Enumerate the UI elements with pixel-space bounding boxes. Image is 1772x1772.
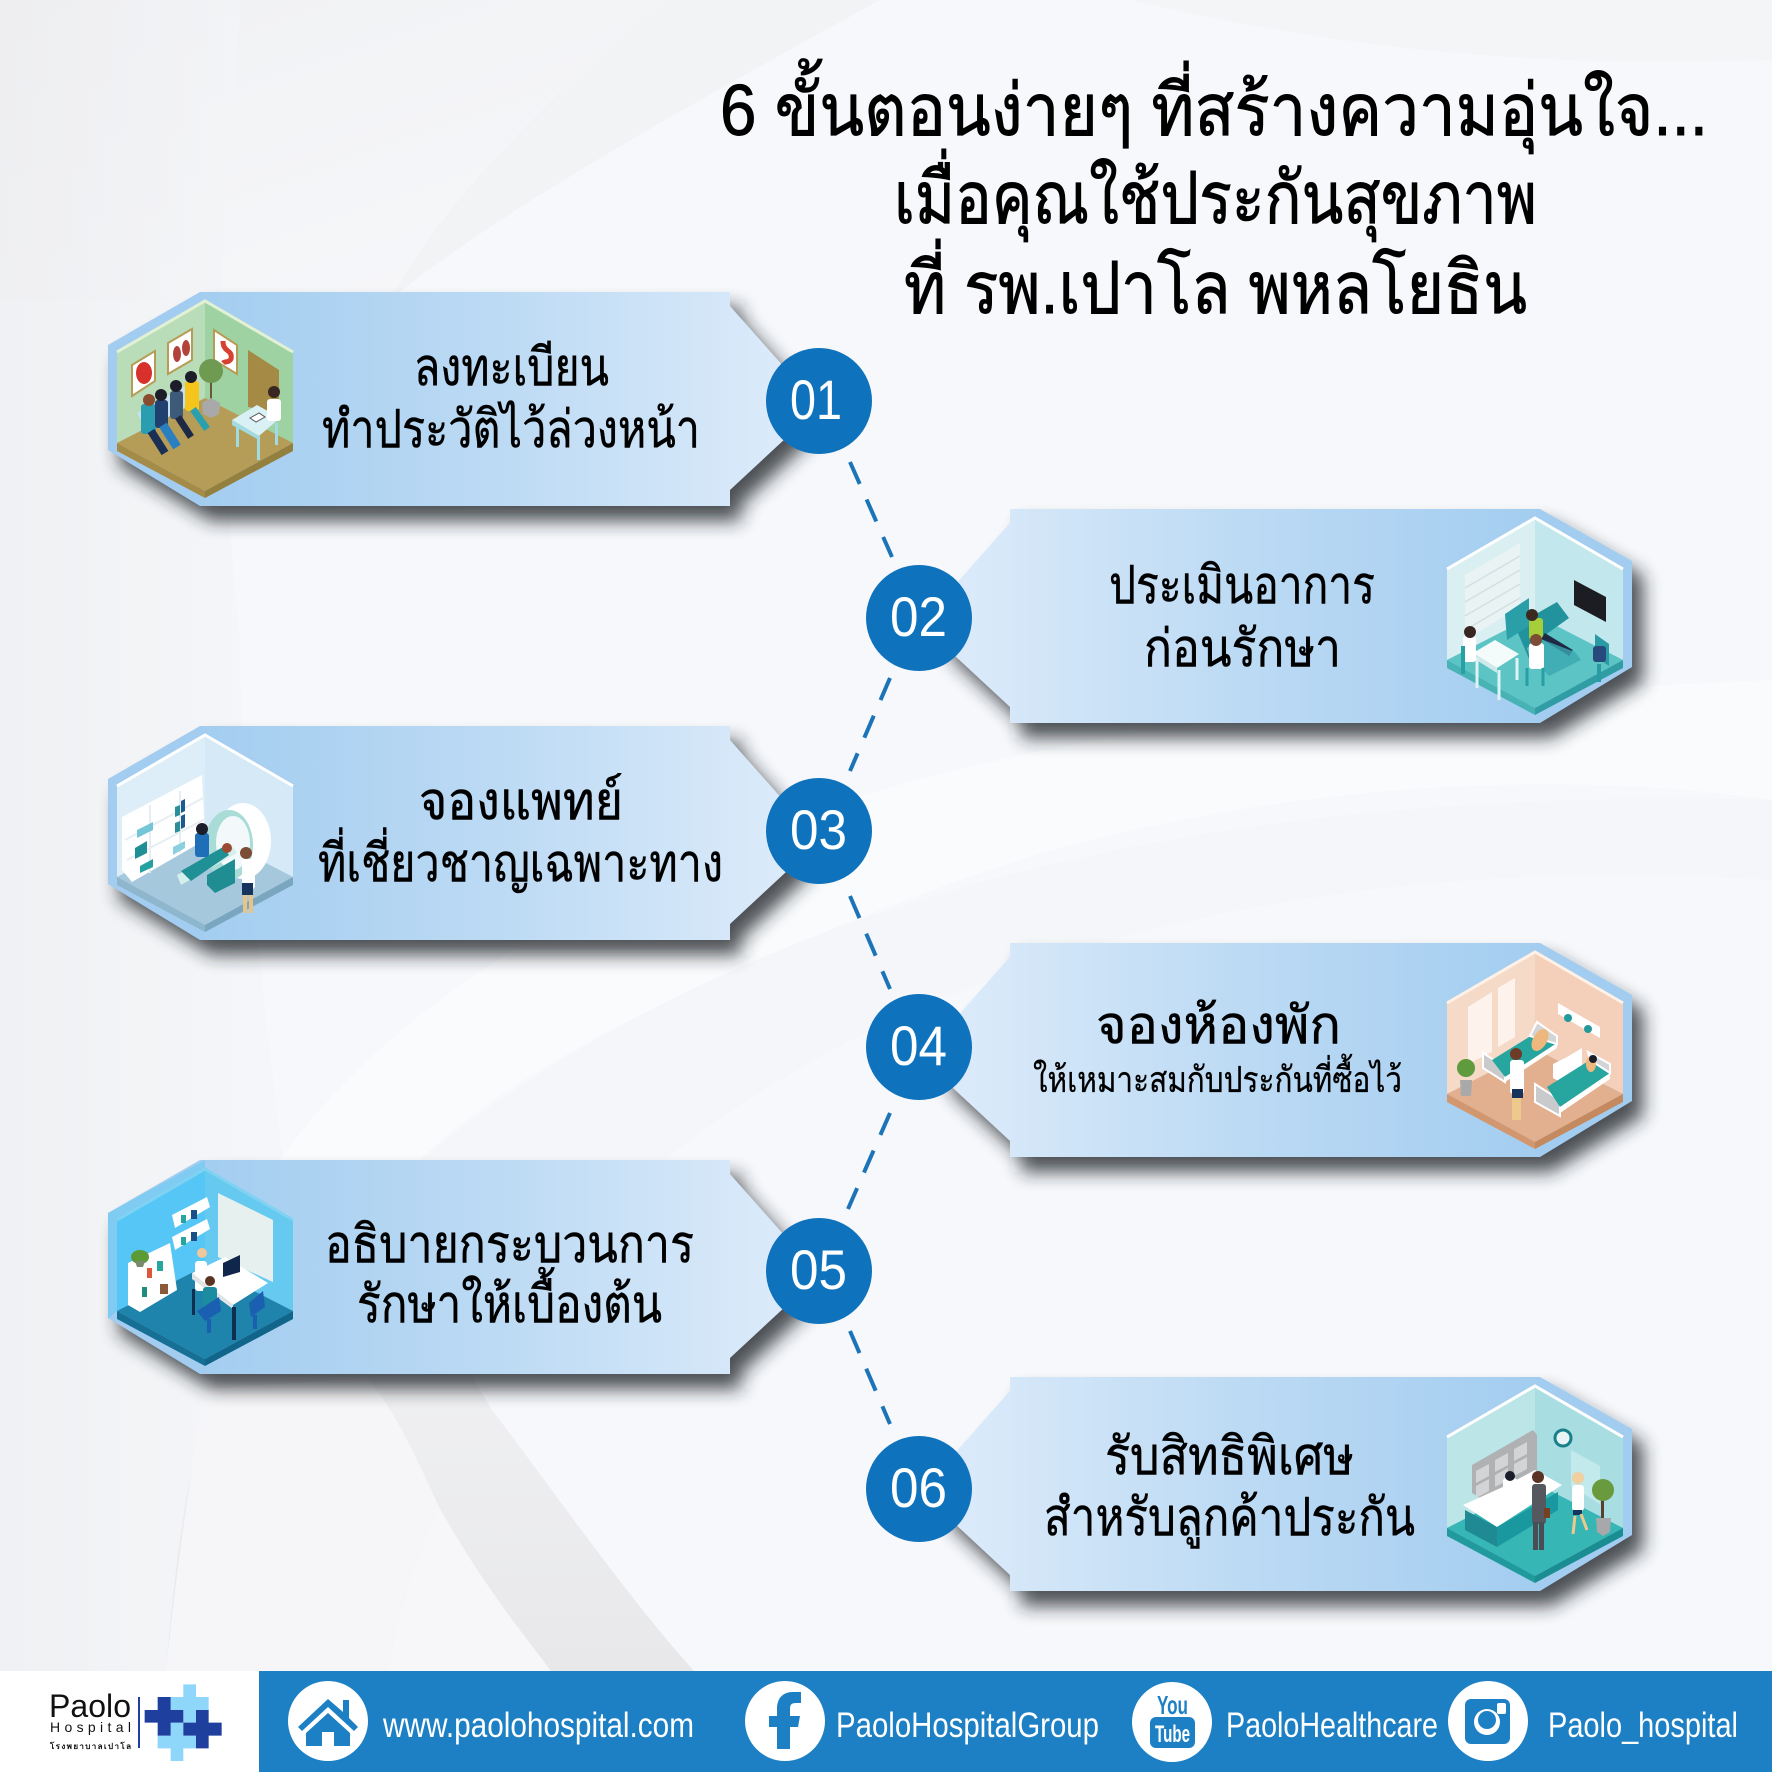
panel: step 3	[108, 726, 811, 955]
website: www.paolohospital.com	[382, 1706, 694, 1745]
logo wordmark	[49, 1688, 140, 1751]
title: เมื่อคุณใช้ประกันสุขภาพ	[894, 149, 1537, 242]
youtube name: PaoloHealthcare	[1226, 1706, 1438, 1745]
icon: home	[288, 1681, 368, 1761]
number badge 04	[866, 994, 972, 1100]
icon: youtube: Tube	[1155, 1721, 1190, 1748]
footer contact bar	[259, 1671, 1772, 1772]
logo crosses	[145, 1684, 222, 1761]
dashed connector lines	[848, 462, 892, 1424]
logo wordmark: โรงพยาบาลเปาโล	[49, 1741, 131, 1751]
step 5 label	[325, 1216, 694, 1334]
number badge 03: 03	[790, 798, 847, 861]
step 4 label: ให้เหมาะสมกับประกันที่ซื้อไว้	[1033, 1053, 1402, 1100]
step 5 label: อธิบายกระบวนการ	[325, 1216, 694, 1274]
step 2 label	[1109, 557, 1375, 678]
icon: waiting room	[117, 301, 293, 498]
step 4 label	[1033, 997, 1402, 1100]
step 4 label: จองห้องพัก	[1096, 997, 1341, 1055]
logo wordmark: Hospital	[50, 1719, 131, 1735]
step 5 label: รักษาให้เบื้องต้น	[357, 1267, 662, 1334]
icon: instagram	[1448, 1681, 1528, 1761]
footer logo panel	[0, 1671, 259, 1772]
step 1 label	[322, 339, 700, 459]
step 1 label: ลงทะเบียน	[414, 339, 609, 397]
step 3 label	[318, 773, 723, 893]
step 6 label: รับสิทธิพิเศษ	[1105, 1428, 1354, 1486]
icon: youtube	[1132, 1682, 1212, 1762]
icon: assessment room	[1447, 518, 1623, 715]
number badge 02: 02	[890, 585, 947, 648]
icon: reception room	[1447, 1386, 1623, 1583]
step 2 label: ก่อนรักษา	[1144, 620, 1341, 678]
number badge 06	[866, 1436, 972, 1542]
icon: consultation room	[108, 1160, 293, 1366]
facebook name: PaoloHospitalGroup	[836, 1706, 1099, 1745]
title	[720, 58, 1708, 329]
number badge 01	[766, 348, 872, 454]
icon: youtube: You	[1157, 1690, 1188, 1720]
number badge 06: 06	[890, 1456, 947, 1519]
number badge 02	[866, 565, 972, 671]
panel: step 5	[108, 1160, 811, 1389]
step 1 label: ทำประวัติไว้ล่วงหน้า	[322, 400, 700, 459]
number badge 05: 05	[790, 1238, 847, 1301]
instagram name: Paolo_hospital	[1548, 1706, 1738, 1745]
number badge 05	[766, 1218, 872, 1324]
number badge 04: 04	[890, 1014, 947, 1077]
step 3 label: จองแพทย์	[419, 773, 623, 831]
panel: step 2	[940, 509, 1643, 738]
number badge 03	[766, 778, 872, 884]
panel: step 4	[940, 943, 1643, 1172]
panel: step 1	[108, 292, 811, 521]
number badge 01: 01	[790, 368, 842, 431]
panel: step 6	[940, 1377, 1643, 1606]
icon: facebook	[745, 1681, 825, 1761]
logo wordmark: Paolo	[49, 1688, 131, 1724]
icon: patient room	[1447, 952, 1623, 1149]
icon: MRI room	[117, 735, 293, 932]
step 6 label	[1044, 1428, 1415, 1549]
step 2 label: ประเมินอาการ	[1109, 557, 1375, 615]
step 3 label: ที่เชี่ยวชาญเฉพาะทาง	[318, 827, 723, 893]
title: ที่ รพ.เปาโล พหลโยธิน	[904, 239, 1527, 329]
step 6 label: สำหรับลูกค้าประกัน	[1044, 1489, 1415, 1549]
